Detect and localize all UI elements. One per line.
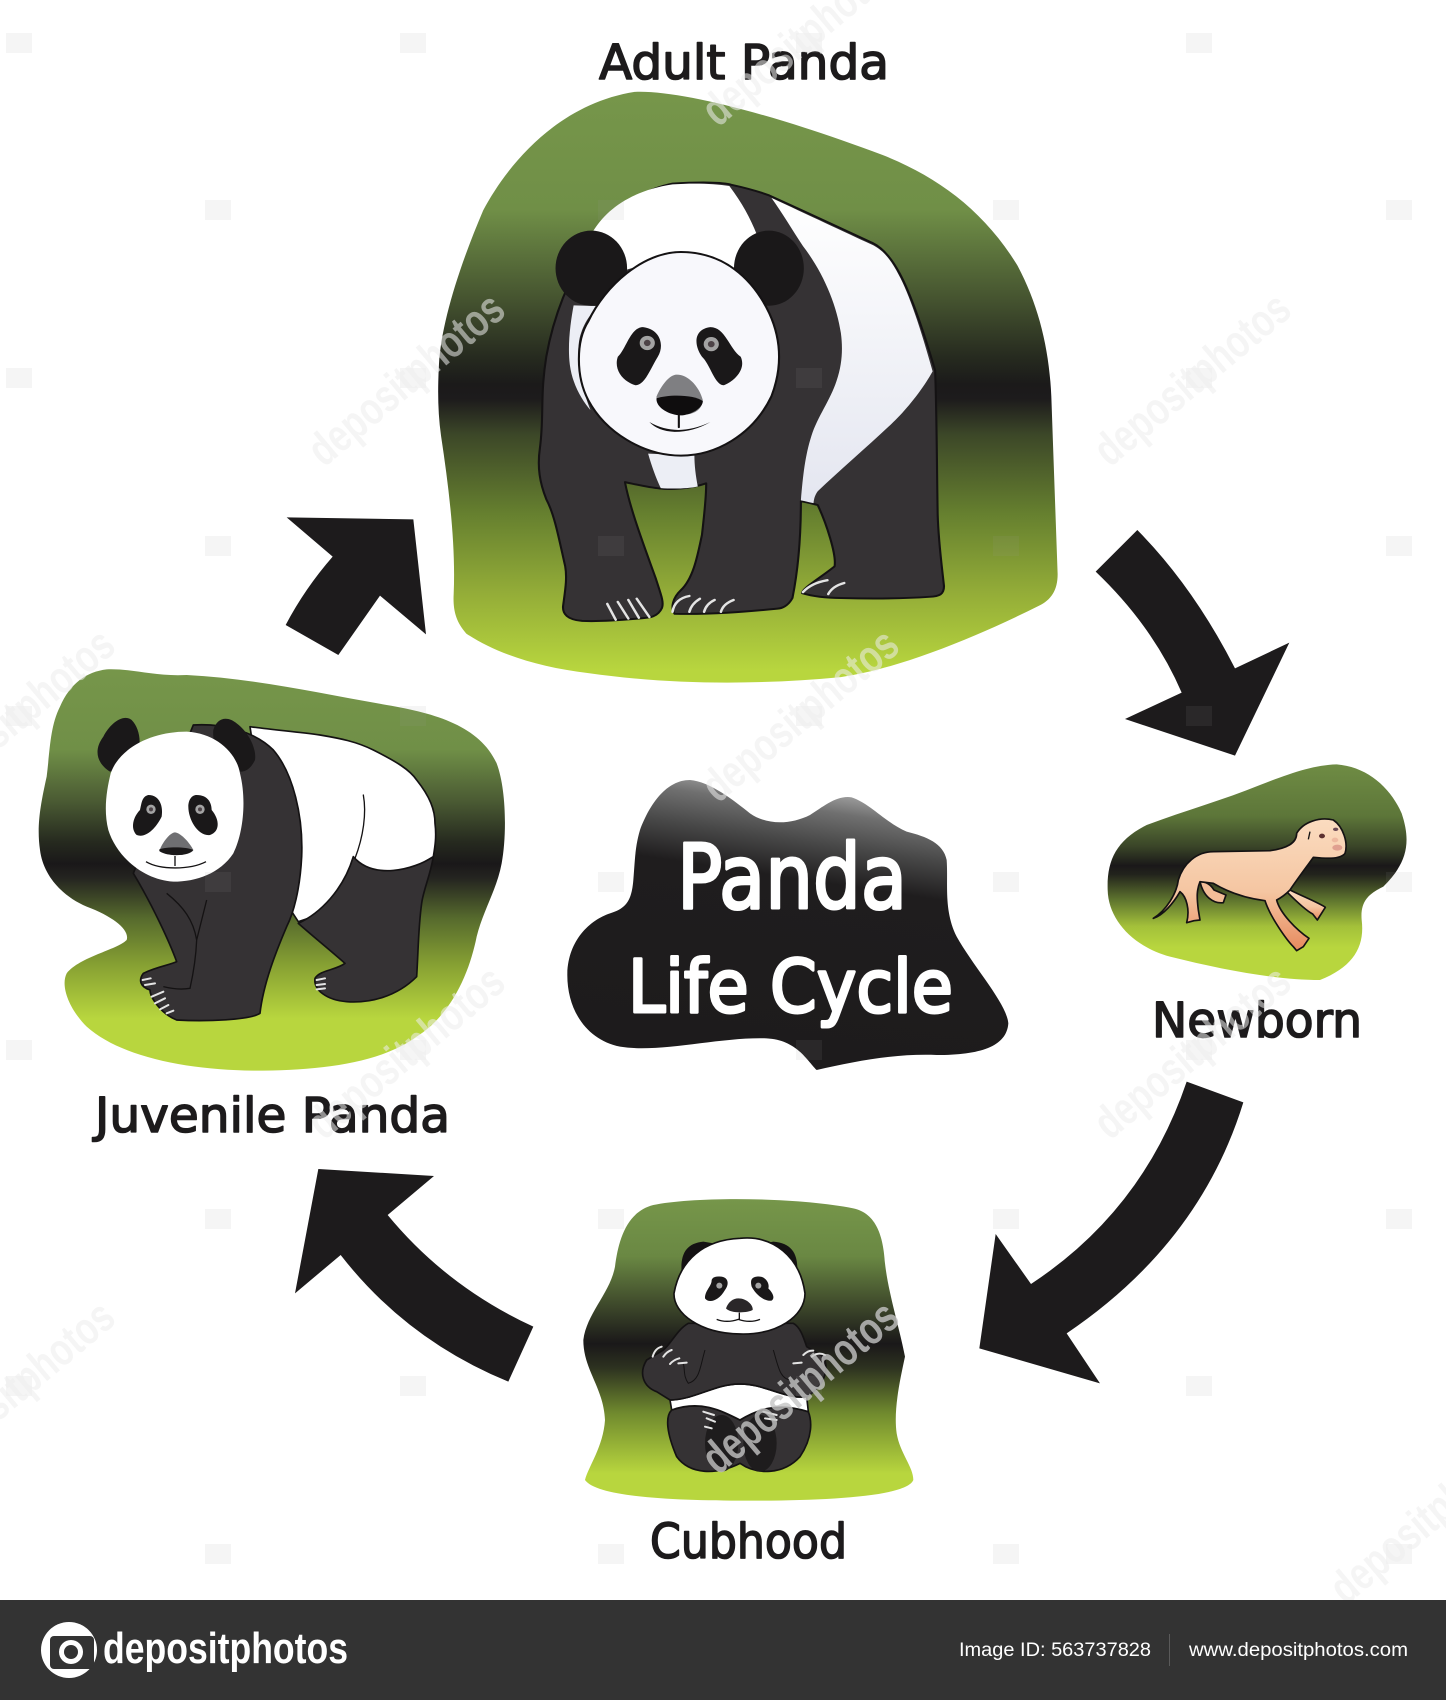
panel: newborn bbox=[1108, 764, 1407, 980]
panel: adult panda bbox=[438, 92, 1058, 683]
center title badge bbox=[567, 780, 1008, 1070]
stock watermark: depositphotos bbox=[691, 1290, 908, 1484]
stock watermark: depositphotos bbox=[1083, 955, 1300, 1149]
claws bbox=[607, 580, 844, 620]
mouth bbox=[1332, 845, 1342, 851]
label: Adult Panda: Adult Panda bbox=[599, 35, 889, 91]
arrow: juvenile to adult bbox=[286, 517, 426, 655]
nose bbox=[656, 396, 703, 415]
body bbox=[1153, 819, 1346, 951]
cub panda figure bbox=[643, 1238, 826, 1472]
label: Juvenile Panda: Juvenile Panda bbox=[92, 1088, 450, 1144]
right eye patch bbox=[696, 327, 742, 385]
belly bbox=[670, 1384, 808, 1420]
newborn habitat blob bbox=[1108, 764, 1407, 980]
right ear bbox=[734, 231, 804, 306]
arrow: newborn to cubhood bbox=[979, 1082, 1243, 1383]
hind leg bbox=[1200, 882, 1226, 903]
head bbox=[106, 732, 243, 882]
eye patches bbox=[133, 795, 218, 836]
back white patch bbox=[771, 198, 933, 503]
eyes bbox=[716, 1283, 722, 1289]
arms and chest bbox=[643, 1323, 826, 1400]
right eye bbox=[704, 337, 719, 351]
panel: cubhood bbox=[583, 1199, 913, 1501]
hind leg bbox=[298, 857, 433, 1002]
stock watermark: depositphotos bbox=[297, 282, 514, 476]
divider bbox=[1169, 1634, 1170, 1666]
cubhood habitat blob bbox=[583, 1199, 913, 1501]
legs bbox=[668, 1406, 811, 1471]
arrow: adult to newborn bbox=[1096, 530, 1289, 756]
juvenile habitat blob bbox=[39, 669, 505, 1071]
front far leg bbox=[1287, 890, 1325, 920]
adult panda figure bbox=[539, 183, 944, 621]
claws bbox=[653, 1347, 825, 1428]
arrow: cubhood to juvenile bbox=[295, 1169, 533, 1382]
flank white patch bbox=[569, 305, 599, 410]
title blob bbox=[567, 780, 1008, 1070]
eyes bbox=[146, 805, 156, 814]
label: Newborn: Newborn bbox=[1152, 993, 1362, 1049]
chest white patch bbox=[648, 454, 698, 489]
title line 2: Life Cycle bbox=[628, 945, 953, 1030]
eye bbox=[1319, 834, 1325, 838]
nose bbox=[159, 832, 193, 855]
foreleg creases bbox=[163, 893, 207, 989]
mouth bbox=[717, 1313, 760, 1321]
head bbox=[674, 1238, 805, 1334]
logo wordmark: depositphotos bbox=[103, 1624, 348, 1673]
newborn cub figure bbox=[1153, 819, 1346, 951]
back crease bbox=[355, 795, 365, 858]
nose bbox=[726, 1298, 753, 1312]
head bbox=[579, 252, 779, 456]
ear bbox=[1308, 832, 1310, 839]
left ear bbox=[556, 231, 627, 306]
mouth bbox=[649, 422, 710, 432]
title line 1: Panda bbox=[677, 825, 907, 929]
image id: Image ID: 563737828 bbox=[959, 1640, 1151, 1661]
neck white patch bbox=[593, 184, 757, 270]
icon: depositphotos logo bbox=[41, 1622, 97, 1678]
stock watermark: depositphotos bbox=[1083, 282, 1300, 476]
adult habitat blob bbox=[438, 92, 1058, 683]
body silhouette bbox=[539, 183, 944, 621]
ears bbox=[98, 718, 255, 772]
arm creases bbox=[683, 1350, 792, 1383]
website: www.depositphotos.com bbox=[1188, 1640, 1408, 1661]
stock watermark: depositphotos bbox=[297, 955, 514, 1149]
eye patches bbox=[705, 1276, 773, 1301]
mouth bbox=[146, 856, 206, 868]
shoulder and foreleg bbox=[133, 725, 302, 1021]
left eye bbox=[640, 336, 655, 350]
footer bar bbox=[0, 1600, 1446, 1700]
claws bbox=[143, 978, 325, 1013]
label: Cubhood: Cubhood bbox=[650, 1514, 847, 1570]
panel: juvenile panda bbox=[39, 669, 505, 1071]
nose bridge bbox=[656, 375, 703, 415]
left eye patch bbox=[617, 327, 661, 385]
juvenile panda figure bbox=[98, 718, 436, 1021]
back white body bbox=[250, 727, 436, 922]
foot pads bbox=[705, 1415, 738, 1472]
ears bbox=[681, 1242, 797, 1273]
stock watermark: depositphotos bbox=[691, 618, 908, 812]
